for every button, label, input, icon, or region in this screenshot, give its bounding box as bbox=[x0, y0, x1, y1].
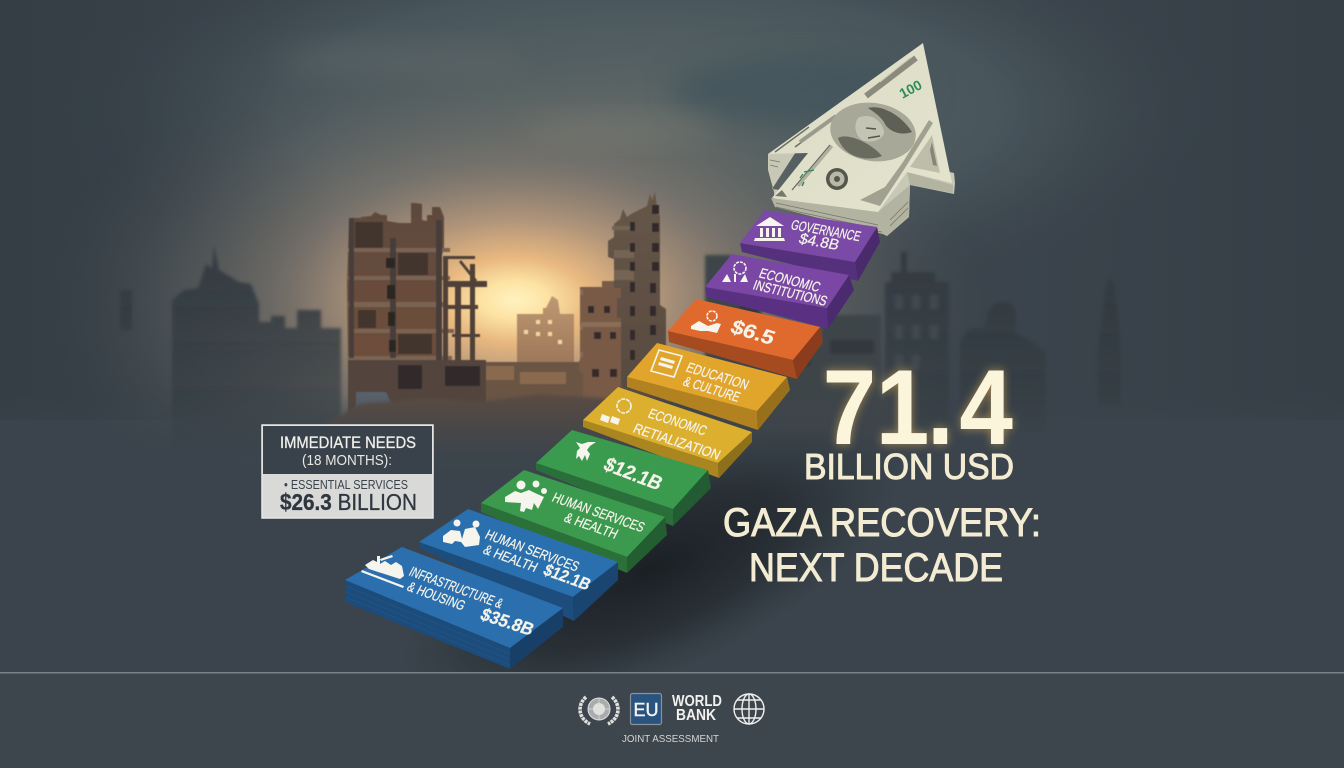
step: blue infrastructure and housing: $35.8B bbox=[477, 605, 537, 639]
step: green human services: HUMAN SERVICES bbox=[550, 489, 648, 535]
ruined tower right of sun bbox=[579, 192, 666, 418]
step: economic institutions: ECONOMIC bbox=[757, 265, 823, 295]
shadow beneath staircase bbox=[361, 364, 939, 768]
rubble fading into foreground bbox=[0, 394, 1344, 674]
icon: houses and crane bbox=[361, 555, 404, 588]
step: economic institutions bbox=[705, 254, 854, 329]
step: governance: GOVERNANCE bbox=[789, 217, 863, 244]
callout: immediate needs: $26.3 BILLION bbox=[280, 489, 417, 515]
step: economic revitalization: RETIALIZATION bbox=[631, 420, 723, 463]
step: governance bbox=[740, 210, 880, 281]
icon: government building bbox=[754, 217, 785, 241]
title: NEXT DECADE bbox=[749, 546, 1003, 590]
title: GAZA RECOVERY: bbox=[723, 501, 1041, 545]
callout: immediate needs: (18 MONTHS): bbox=[302, 453, 392, 469]
step: blue human services: HUMAN SERVICES bbox=[483, 526, 582, 574]
logo: world bank: BANK bbox=[676, 707, 717, 724]
logo: eu bbox=[630, 694, 662, 724]
icon: care-giver and patient bbox=[443, 520, 480, 547]
step: blue infrastructure and housing: INFRASTRUCTURE & bbox=[407, 563, 507, 611]
icon: gear and columns bbox=[722, 262, 748, 282]
ruins behind upper steps bbox=[640, 255, 890, 460]
step: blue human services bbox=[419, 509, 618, 621]
step: blue human services: $12.1B bbox=[540, 561, 594, 594]
portrait oval bbox=[826, 97, 920, 167]
headline figure glow: 71.4 bbox=[823, 347, 1013, 467]
footer divider bbox=[0, 672, 1344, 768]
step: green human services: & HEALTH bbox=[562, 509, 621, 542]
step: blue infrastructure and housing bbox=[345, 547, 563, 669]
mid-ground sunlit buildings bbox=[470, 281, 622, 442]
logo: world bank bbox=[672, 693, 722, 724]
icon: caduceus and people bbox=[576, 442, 596, 461]
step: economic revitalization: ECONOMIC bbox=[646, 405, 710, 438]
icon: gear over open book bbox=[691, 311, 721, 333]
arrow left wing border bbox=[775, 125, 825, 152]
icon: gear and shops bbox=[600, 399, 631, 425]
logo: united nations bbox=[580, 697, 618, 724]
step: blue human services: & HEALTH bbox=[481, 541, 541, 575]
step: green human services bbox=[481, 470, 667, 573]
arrow front note border bbox=[792, 145, 830, 190]
step: governance: $4.8B bbox=[797, 231, 841, 254]
step: education and culture: EDUCATION bbox=[684, 359, 752, 392]
step: blue infrastructure and housing: & HOUSING bbox=[405, 578, 469, 613]
step: green $12.1B bbox=[536, 430, 711, 526]
joint assessment note: JOINT ASSESSMENT bbox=[622, 733, 720, 745]
title bbox=[723, 501, 1041, 590]
icon: book bbox=[651, 350, 682, 377]
step: education and culture: & CULTURE bbox=[681, 373, 743, 405]
step: education and culture bbox=[627, 343, 790, 430]
treasury seal bbox=[826, 168, 848, 190]
headline figure: 71.4 bbox=[823, 347, 1013, 467]
dollar arrow bbox=[768, 43, 955, 236]
logo: world bank: WORLD bbox=[672, 693, 722, 710]
step: orange $6.5: $6.5 bbox=[727, 317, 778, 349]
step: economic institutions: INSTITUTIONS bbox=[751, 277, 830, 309]
step: economic revitalization bbox=[583, 387, 752, 478]
step: green $12.1B: $12.1B bbox=[600, 454, 666, 495]
callout: immediate needs bbox=[262, 425, 433, 518]
green 100: 100 bbox=[896, 76, 925, 102]
arrow stack sides bbox=[768, 144, 955, 236]
ruined building left bbox=[347, 203, 487, 445]
step: orange $6.5 bbox=[668, 299, 823, 379]
distant ruined skyline bbox=[120, 246, 1121, 458]
callout: immediate needs: • ESSENTIAL SERVICES bbox=[284, 477, 408, 492]
arrow back note bbox=[768, 43, 952, 212]
callout: immediate needs: IMMEDIATE NEEDS bbox=[280, 433, 416, 452]
arrow right wing bbox=[910, 135, 940, 173]
logo: globe bbox=[734, 694, 764, 724]
icon: family group bbox=[505, 480, 547, 512]
subheading: billion usd: BILLION USD bbox=[804, 446, 1014, 487]
logo: eu: EU bbox=[633, 700, 659, 720]
